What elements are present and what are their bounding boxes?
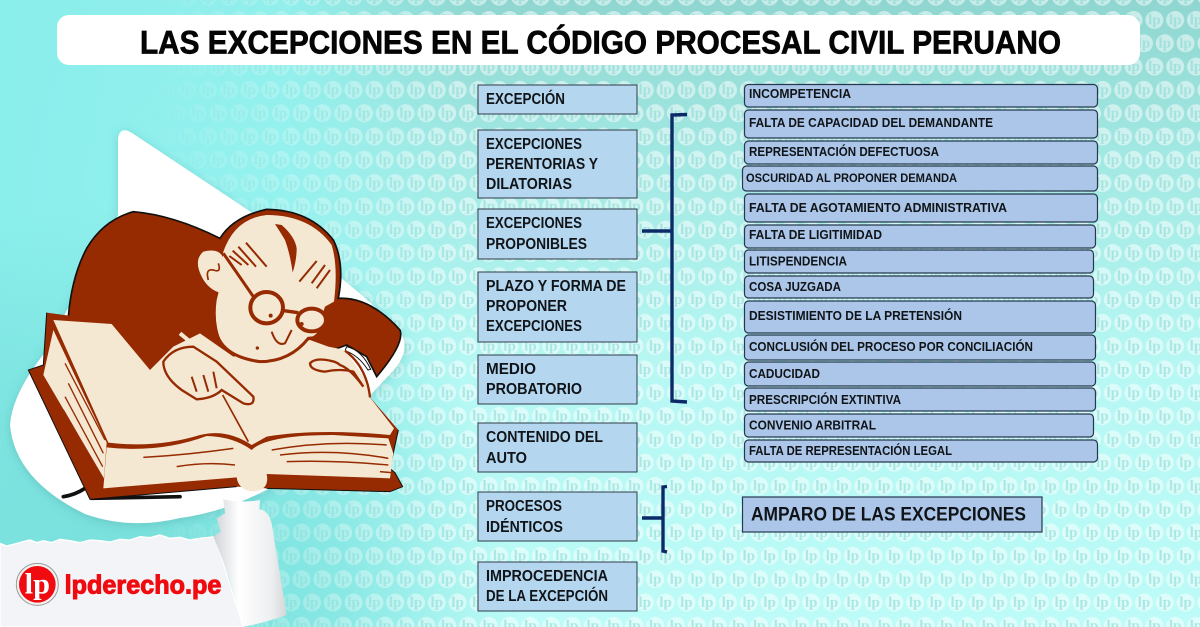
item: caducidad <box>744 362 1096 386</box>
logo badge <box>16 563 58 605</box>
box: proponibles: PROPONIBLES <box>486 236 587 253</box>
illustration: reader on book <box>28 209 403 499</box>
page edges left <box>43 330 107 478</box>
item: legitimidad <box>744 225 1096 248</box>
box: amparo de las excepciones: AMPARO DE LAS EXCEPCIONES <box>751 504 1026 526</box>
item: oscuridad <box>742 166 1098 191</box>
box: excepción <box>478 85 637 114</box>
item: desistimiento: DESISTIMIENTO DE LA PRETENSIÓN <box>749 308 962 323</box>
item: cosa juzgada: COSA JUZGADA <box>749 279 841 294</box>
box: procesos idénticos: IDÉNTICOS <box>486 519 563 536</box>
shadow under book <box>63 488 180 498</box>
glasses <box>250 292 283 323</box>
fold line <box>223 395 248 442</box>
item: falta de capacidad <box>744 110 1098 138</box>
white drop shape <box>10 130 404 523</box>
box: proponibles: EXCEPCIONES <box>486 215 582 232</box>
book cover <box>28 313 403 499</box>
logo badge: lp <box>25 568 50 601</box>
box: proponibles <box>478 209 637 259</box>
item: legitimidad: FALTA DE LIGITIMIDAD <box>749 227 882 242</box>
torn paper logo <box>0 499 287 627</box>
paper curl <box>213 499 287 627</box>
right hand <box>310 359 363 387</box>
box: medio probatorio <box>478 355 637 404</box>
item: representación defectuosa <box>744 141 1098 164</box>
open page <box>53 320 394 445</box>
box: plazo y forma: EXCEPCIONES <box>486 318 582 335</box>
white sliver under sleeve <box>345 347 371 370</box>
box: contenido del auto <box>478 423 637 472</box>
box: amparo de las excepciones <box>742 497 1042 532</box>
small bracket <box>642 486 667 552</box>
logo text: lpderecho.pe <box>65 569 221 599</box>
item: caducidad: CADUCIDAD <box>749 366 820 381</box>
box: improcedencia: IMPROCEDENCIA <box>486 568 608 585</box>
box: contenido del auto: CONTENIDO DEL <box>486 429 603 446</box>
item: representación defectuosa: REPRESENTACIÓN DEFECTUOSA <box>749 144 939 159</box>
item: cosa juzgada <box>744 276 1094 298</box>
head <box>198 215 336 362</box>
brown body <box>68 209 401 387</box>
box: perentorias y dilatorias: PERENTORIAS Y <box>486 156 599 173</box>
box: excepción: EXCEPCIÓN <box>486 90 565 108</box>
left column: topic boxes <box>478 85 637 611</box>
left pointing hand <box>163 333 254 404</box>
box: medio probatorio: PROBATORIO <box>486 381 582 398</box>
box: procesos idénticos <box>478 492 637 541</box>
box: medio probatorio: MEDIO <box>486 361 536 378</box>
item: litispendencia <box>744 250 1094 273</box>
item: falta de capacidad: FALTA DE CAPACIDAD DEL DEMANDANTE <box>749 115 993 130</box>
paper strip <box>0 535 243 627</box>
item: convenio arbitral <box>744 414 1094 437</box>
item: litispendencia: LITISPENDENCIA <box>749 254 847 268</box>
box: procesos idénticos: PROCESOS <box>486 498 562 515</box>
title banner <box>57 15 1140 65</box>
box: perentorias y dilatorias: EXCEPCIONES <box>486 136 582 153</box>
lower page block <box>103 435 393 492</box>
title banner: LAS EXCEPCIONES EN EL CÓDIGO PROCESAL CIVIL PERUANO <box>140 24 1061 60</box>
box: improcedencia <box>478 562 637 611</box>
large bracket <box>642 114 687 402</box>
box: contenido del auto: AUTO <box>486 450 527 467</box>
item: prescripción: PRESCRIPCIÓN EXTINTIVA <box>749 392 901 407</box>
item: agotamiento: FALTA DE AGOTAMIENTO ADMINISTRATIVA <box>749 200 1007 215</box>
item: incompetencia <box>744 84 1098 107</box>
item: prescripción <box>744 388 1096 411</box>
box: plazo y forma: PLAZO Y FORMA DE <box>486 278 626 295</box>
item: desistimiento <box>744 301 1096 333</box>
box: plazo y forma: PROPONER <box>486 298 567 315</box>
right column: exception list <box>742 84 1098 462</box>
item: representación legal <box>744 440 1098 462</box>
item: conclusión <box>744 335 1096 360</box>
item: representación legal: FALTA DE REPRESENTACIÓN LEGAL <box>749 443 952 458</box>
box: plazo y forma <box>478 272 637 342</box>
item: oscuridad: OSCURIDAD AL PROPONER DEMANDA <box>746 171 957 185</box>
box: perentorias y dilatorias <box>478 130 637 198</box>
box: improcedencia: DE LA EXCEPCIÓN <box>486 587 608 605</box>
nose and mouth <box>272 330 292 344</box>
item: incompetencia: INCOMPETENCIA <box>749 86 851 101</box>
item: agotamiento <box>744 194 1098 222</box>
wrinkles <box>275 224 297 273</box>
item: conclusión: CONCLUSIÓN DEL PROCESO POR CONCILIACIÓN <box>749 339 1033 354</box>
item: convenio arbitral: CONVENIO ARBITRAL <box>749 418 876 432</box>
ear <box>198 251 233 293</box>
box: perentorias y dilatorias: DILATORIAS <box>486 176 572 193</box>
